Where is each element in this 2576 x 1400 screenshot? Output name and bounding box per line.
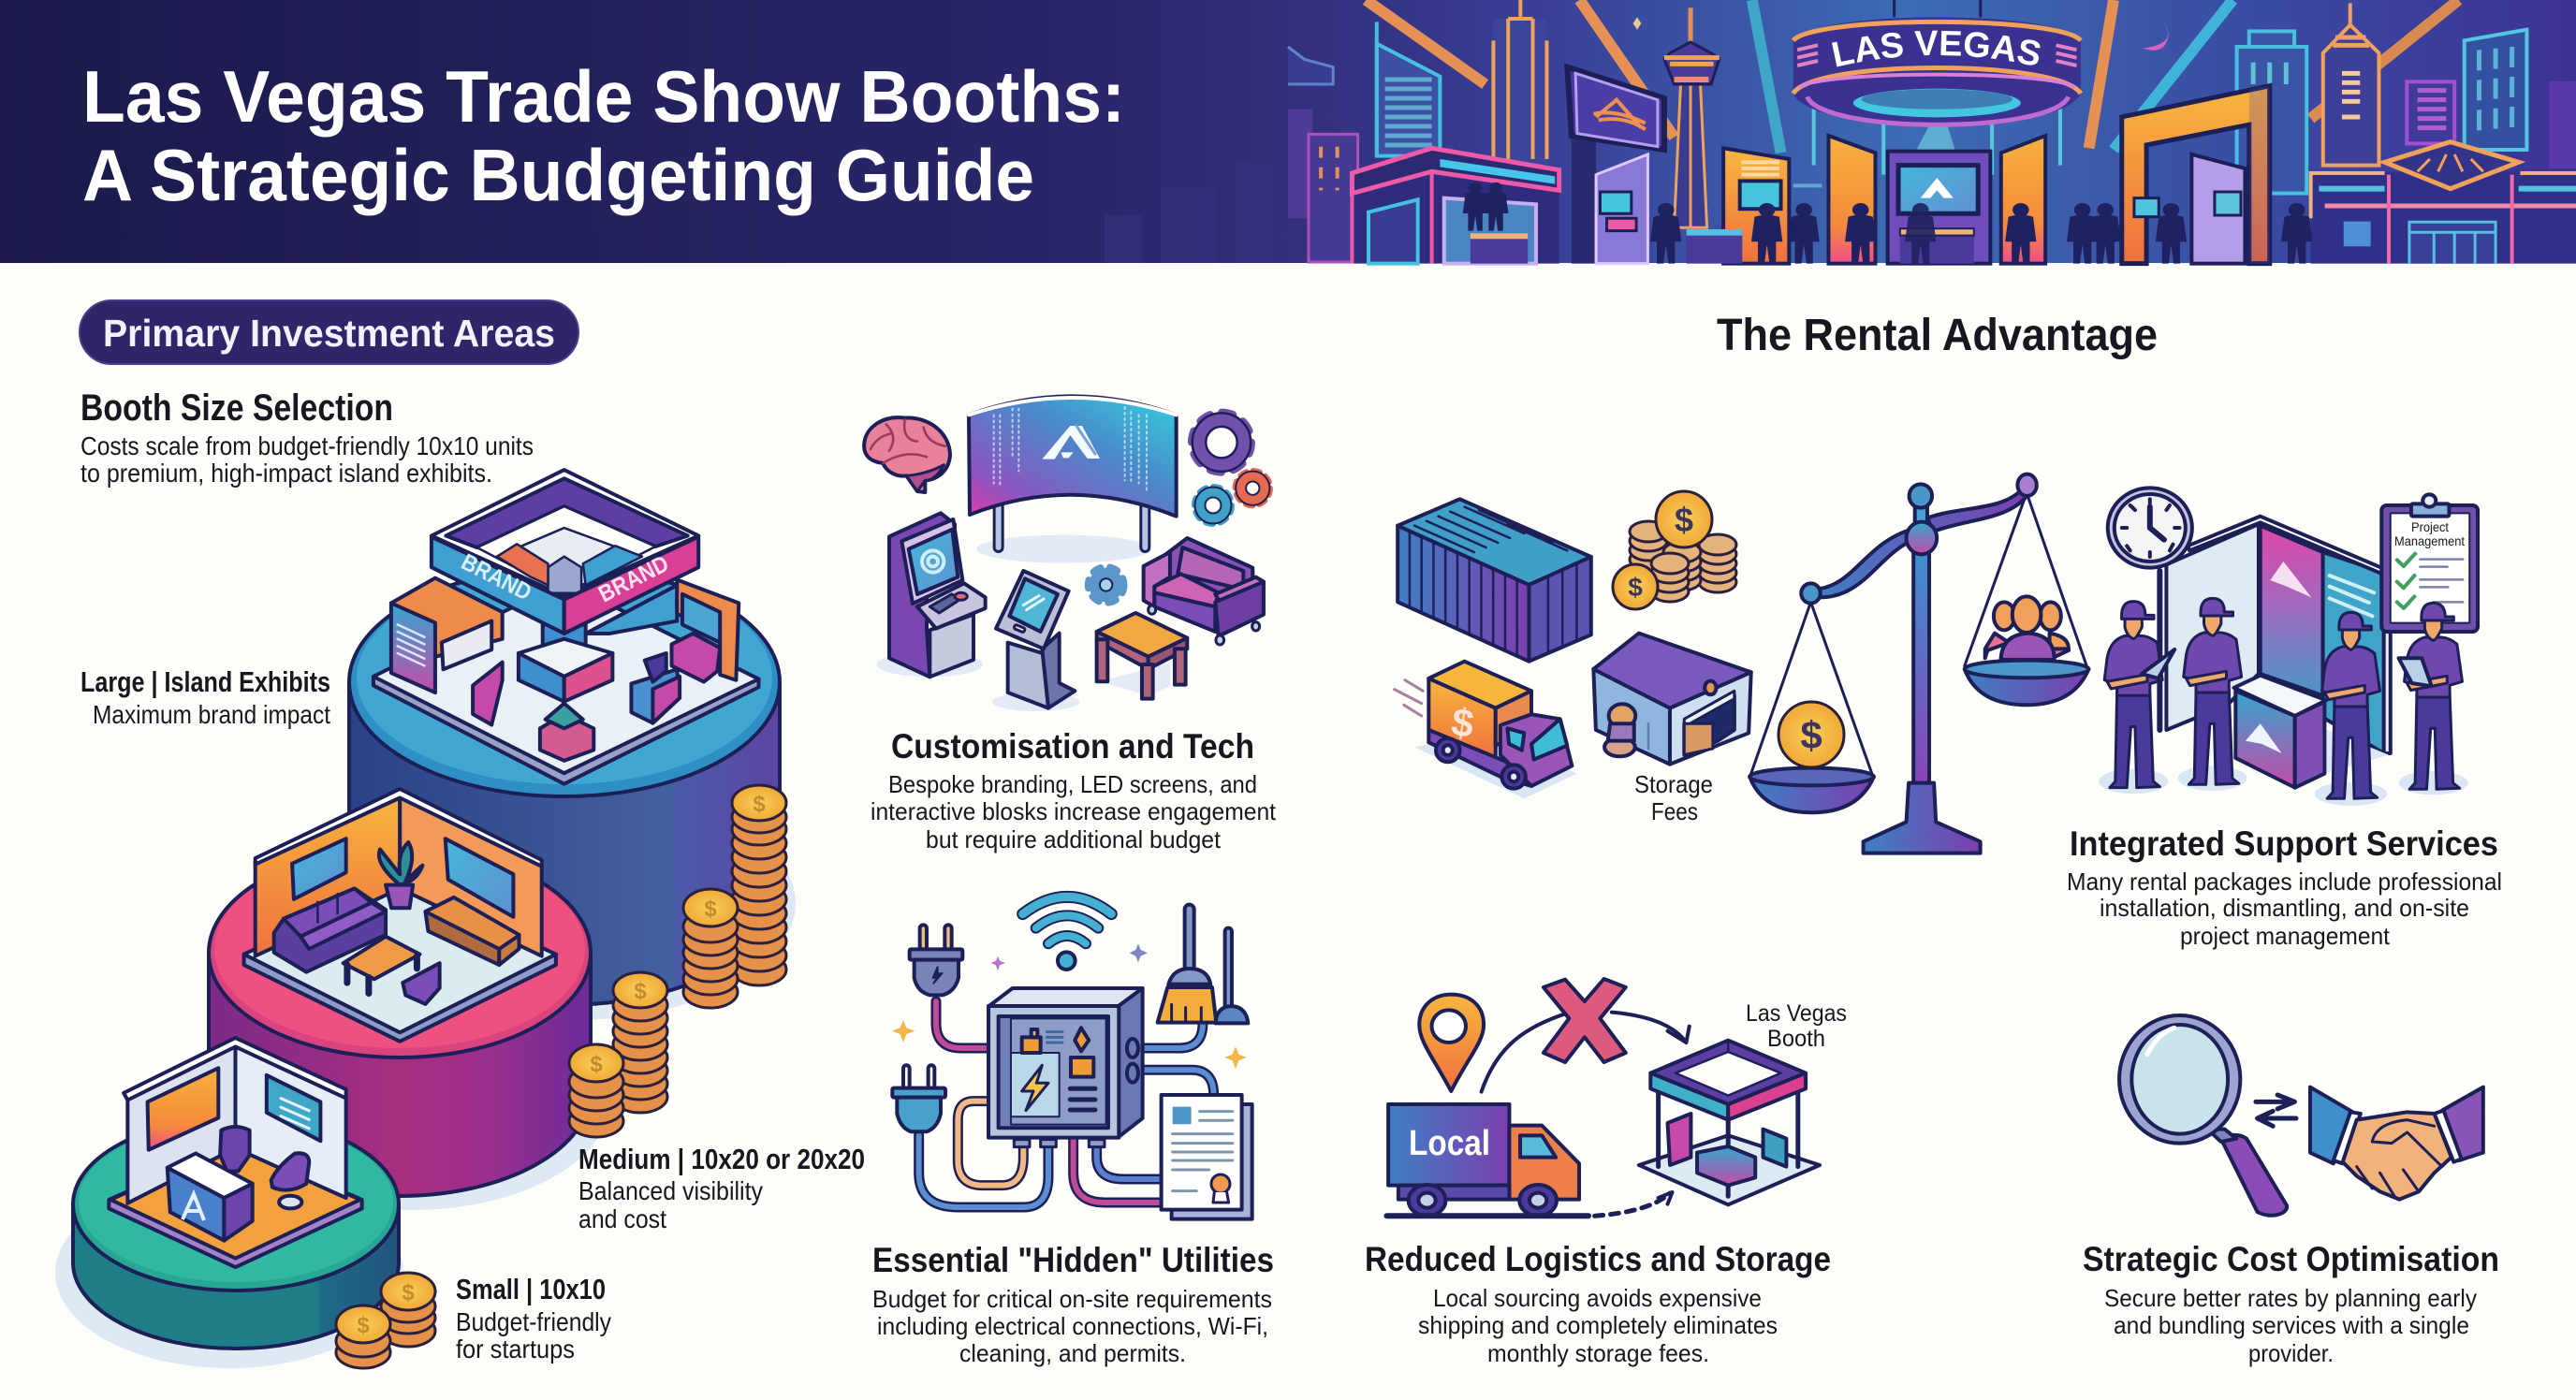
cost coins and stacks [1613,491,1736,609]
medium tier cylinder [209,848,610,1210]
medium tier label: Balanced visibility [578,1176,763,1205]
casino building [2311,142,2576,264]
text: Booth Size Selection [80,387,534,488]
text: Booth Size Selection: to premium, high-impact island exhibits. [80,459,492,488]
coin stacks: medium tier [569,972,667,1137]
delivery truck [1395,662,1576,798]
mini booth [1639,1041,1820,1204]
coin on scale [1778,702,1844,767]
label: large tier [80,665,330,729]
right skyline [2323,3,2576,168]
text: Integrated Support Services: installation, dismantling, and on-site [2100,894,2469,922]
heading: The Rental Advantage: The Rental Advantage [1717,311,2158,360]
medium booth [244,789,556,1042]
text: Essential Hidden Utilities: Budget for critical on-site requirements [872,1285,1272,1313]
kiosk: arcade console [877,513,986,677]
text: Strategic Cost Optimisation: and bundling services with a single [2114,1311,2469,1339]
icon: permit document [1162,1095,1252,1219]
illustration: hidden utilities [892,897,1252,1219]
illustration: integrated support services [2099,488,2478,806]
small tier cylinder [55,1118,403,1368]
icon: handshake [2310,1087,2483,1200]
staff figures [2099,598,2467,806]
icon: crossed-out X [1544,979,1626,1062]
medium tier label: and cost [578,1204,666,1233]
illustration: balance scale [1749,474,2088,853]
large tier cylinder [349,568,796,1020]
icon: blue plug [892,1065,945,1131]
clipboard title [2394,519,2465,548]
illustration: cost optimisation [2119,1015,2483,1216]
billboard and pole [1567,67,1664,264]
BRAND banner labels: BRAND [594,550,673,607]
text: Reduced Logistics and Storage: shipping and completely eliminates [1418,1311,1778,1339]
coin stacks: medium tier: $ [634,979,647,1004]
text: Booth Size Selection: Costs scale from budget-friendly 10x10 units [80,431,534,460]
text: Strategic Cost Optimisation [2083,1240,2499,1367]
coin stacks: large tier [683,785,786,1008]
text: Reduced Logistics and Storage: Reduced Logistics and Storage [1365,1240,1831,1278]
text: Integrated Support Services [2067,824,2502,950]
label: Storage Fees: Storage [1634,770,1713,798]
icon: magnifying glass [2119,1015,2287,1216]
cost coins and stacks: $ [1628,573,1643,602]
text: Customisation and Tech: interactive blosks increase engagement [871,797,1277,825]
coin stacks: medium tier: $ [590,1052,603,1077]
lounge sofa [1144,538,1264,645]
small tier label [456,1273,611,1364]
label: Las Vegas Booth: Booth [1767,1026,1825,1052]
large island booth [373,470,758,784]
kiosk: touchscreen stand [992,571,1079,711]
medium tier label: Medium | 10x20 or 20x20 [578,1143,865,1175]
small tier label: Small | 10x10 [456,1273,606,1305]
small booth [109,1038,362,1267]
icons: gears [1088,413,1270,603]
hanging Las Vegas sign [1793,0,2081,126]
text: Essential Hidden Utilities: including electrical connections, Wi-Fi, [877,1312,1268,1340]
icon: purple plug [910,925,962,995]
clipboard checklist [2381,494,2478,632]
label: large tier: Large | Island Exhibits [80,665,330,698]
illustration: Las Vegas neon scene [1288,0,2576,264]
left booth [1352,148,1559,264]
text: Integrated Support Services: Many rental packages include professional [2067,868,2502,896]
coin stacks: small tier: $ [357,1313,370,1338]
label: Las Vegas Booth [1746,1000,1847,1052]
crowd silhouettes [1650,203,2312,264]
text: Customisation and Tech: Customisation and Tech [891,727,1254,766]
faint skyline left of scene [1105,159,1278,263]
coin on scale: $ [1800,713,1822,757]
icon: wifi [1023,897,1111,970]
coin stacks: small tier: $ [402,1280,415,1305]
icon: broom and mop [1158,905,1248,1023]
coffee table [1097,613,1187,699]
local truck [1386,1104,1673,1216]
text: Integrated Support Services: project management [2180,922,2391,950]
small tier label: Budget-friendly [456,1307,611,1336]
title: Las Vegas Trade Show Booths: [82,55,1125,138]
header banner [0,0,2576,266]
central booth [1814,103,2060,264]
illustration: local truck to Las Vegas booth [1386,979,1847,1216]
coin stacks: large tier: $ [704,897,717,922]
label: Storage Fees: Fees [1651,797,1698,825]
text: Customisation and Tech [871,727,1277,853]
text: Integrated Support Services: Integrated Support Services [2070,824,2498,863]
text: Strategic Cost Optimisation: provider. [2248,1339,2334,1367]
text: Reduced Logistics and Storage: monthly storage fees. [1487,1339,1709,1367]
sparkles [892,943,1247,1069]
text: Customisation and Tech: Bespoke branding, LED screens, and [888,770,1257,798]
text: Customisation and Tech: but require additional budget [926,825,1222,853]
tiered booth size graphic [55,470,865,1368]
truck dollar sign: $ [1449,699,1476,746]
text: Reduced Logistics and Storage [1365,1240,1831,1367]
medium tier label [578,1143,865,1233]
text: Essential Hidden Utilities: cleaning, and permits. [959,1339,1186,1367]
pans [1749,777,1874,812]
heading pill: Primary Investment Areas: Primary Investment Areas [103,312,555,355]
right arch booth [2122,31,2306,264]
route arc [1482,1014,1565,1092]
icon: brain [864,417,950,492]
truck label Local: Local [1409,1124,1490,1163]
text: Reduced Logistics and Storage: Local sourcing avoids expensive [1433,1284,1762,1312]
electrical panel box [988,988,1143,1147]
BRAND banner labels [457,548,673,607]
small tier logo [183,1194,204,1220]
coin stacks: large tier: $ [753,792,766,817]
illustration: shipping and storage costs [1395,491,1751,825]
illustration: customisation and tech [864,396,1270,711]
LED screen [969,396,1177,563]
label: large tier: Maximum brand impact [93,700,330,729]
LAS VEGAS sign text: LAS VEGAS [1832,30,2041,67]
text: Essential Hidden Utilities: Essential "Hidden" Utilities [872,1241,1274,1279]
icon: exchange arrows [2256,1095,2296,1126]
LAS VEGAS sign text [1832,30,2041,67]
small tier label: for startups [456,1334,575,1364]
title [82,55,1125,216]
booth walls [2159,517,2391,789]
label: Storage Fees [1634,770,1713,825]
text: Essential Hidden Utilities [872,1241,1274,1367]
shipping container [1398,499,1591,662]
cables [919,1001,1214,1207]
clipboard title: Project [2411,519,2449,534]
BRAND banner labels: BRAND [457,548,535,606]
cost coins and stacks: $ [1675,501,1693,539]
arrow to booth [1612,1013,1690,1043]
Stratosphere tower [1664,7,1720,227]
clipboard title: Management [2394,533,2465,548]
right pan: people [1985,596,2069,660]
text: Booth Size Selection: Booth Size Selection [80,387,393,429]
coin stacks: small tier [336,1273,435,1368]
storage warehouse [1593,634,1751,765]
icon: map pin [1419,995,1484,1091]
title: A Strategic Budgeting Guide [82,134,1034,216]
text: Strategic Cost Optimisation: Secure better rates by planning early [2104,1284,2477,1312]
counter [2234,676,2326,788]
sofa [274,888,386,972]
text: Strategic Cost Optimisation: Strategic Cost Optimisation [2083,1240,2499,1278]
heading pill: Primary Investment Areas [80,300,578,364]
label: Las Vegas Booth: Las Vegas [1746,1000,1847,1027]
clock [2108,488,2192,568]
